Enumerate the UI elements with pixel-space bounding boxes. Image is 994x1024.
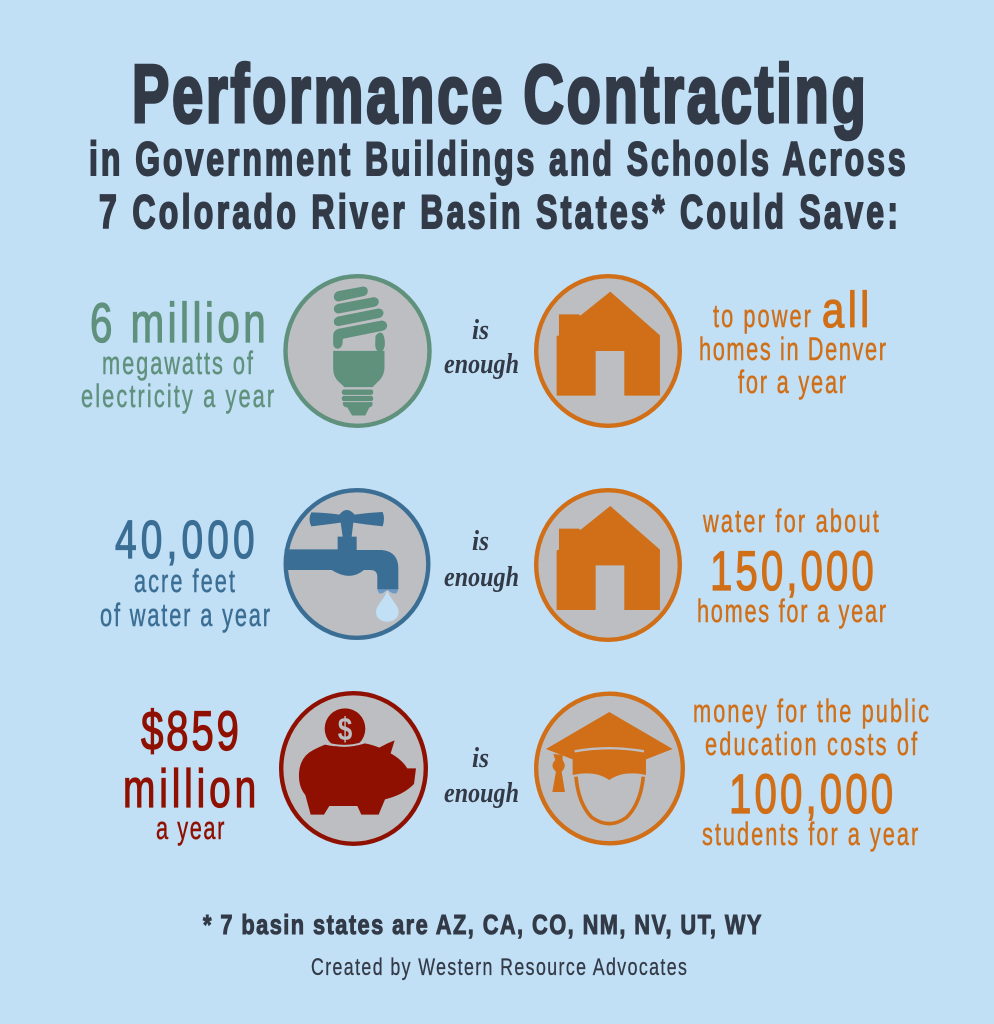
- text: is enough: is: [472, 526, 489, 557]
- text: power homes: for a year: [738, 364, 846, 400]
- title: 7 Colorado River Basin States* Could Save:: [99, 186, 898, 239]
- title: in Government Buildings and Schools Across: [89, 133, 906, 186]
- text: money saved: a year: [156, 810, 224, 846]
- text: education costs: money for the public: [693, 693, 929, 729]
- text: power homes: all: [822, 282, 869, 338]
- icon: house: [536, 490, 680, 640]
- text: money saved: [123, 701, 256, 846]
- credit: Created by Western Resource Advocates: [311, 955, 687, 981]
- text: power homes: to power: [713, 298, 811, 334]
- text: water saved: 40,000: [115, 509, 255, 569]
- text: education costs: students for a year: [702, 816, 918, 852]
- text: water saved: acre feet: [134, 563, 235, 599]
- footnote: * 7 basin states are AZ, CA, CO, NM, NV, UT, WY: [203, 909, 762, 941]
- text: is enough: enough: [444, 349, 519, 380]
- text: is enough: [444, 743, 519, 809]
- text: power homes: homes in Denver: [699, 331, 886, 367]
- text: education costs: education costs of: [705, 726, 917, 762]
- icon: graduation cap: [536, 694, 683, 843]
- text: is enough: enough: [444, 562, 519, 593]
- icon: faucet: [285, 490, 428, 638]
- icon: piggy bank: [281, 693, 426, 844]
- text: electricity saved: megawatts of: [102, 345, 253, 381]
- text: electricity saved: [81, 293, 274, 414]
- text: is enough: is: [472, 743, 489, 774]
- icon: light bulb: [286, 276, 430, 426]
- text: is enough: [444, 315, 519, 380]
- text: is enough: [444, 526, 519, 593]
- title: Performance Contracting: [132, 48, 866, 140]
- text: water homes: [697, 503, 886, 629]
- text: electricity saved: 6 million: [90, 293, 266, 355]
- text: power homes: [699, 282, 886, 400]
- icon: piggy bank: $: [338, 711, 353, 748]
- text: water saved: of water a year: [100, 597, 270, 633]
- text: is enough: enough: [444, 778, 519, 809]
- text: water homes: homes for a year: [697, 593, 886, 629]
- title: [89, 48, 906, 239]
- text: money saved: million: [123, 758, 256, 818]
- text: water saved: [100, 509, 270, 633]
- text: money saved: $859: [141, 701, 239, 763]
- text: education costs: [693, 693, 929, 852]
- text: is enough: is: [472, 315, 489, 346]
- text: education costs: 100,000: [729, 764, 893, 826]
- text: water homes: 150,000: [710, 541, 874, 603]
- text: water homes: water for about: [702, 503, 879, 539]
- text: electricity saved: electricity a year: [81, 378, 274, 414]
- icon: house: [536, 276, 680, 426]
